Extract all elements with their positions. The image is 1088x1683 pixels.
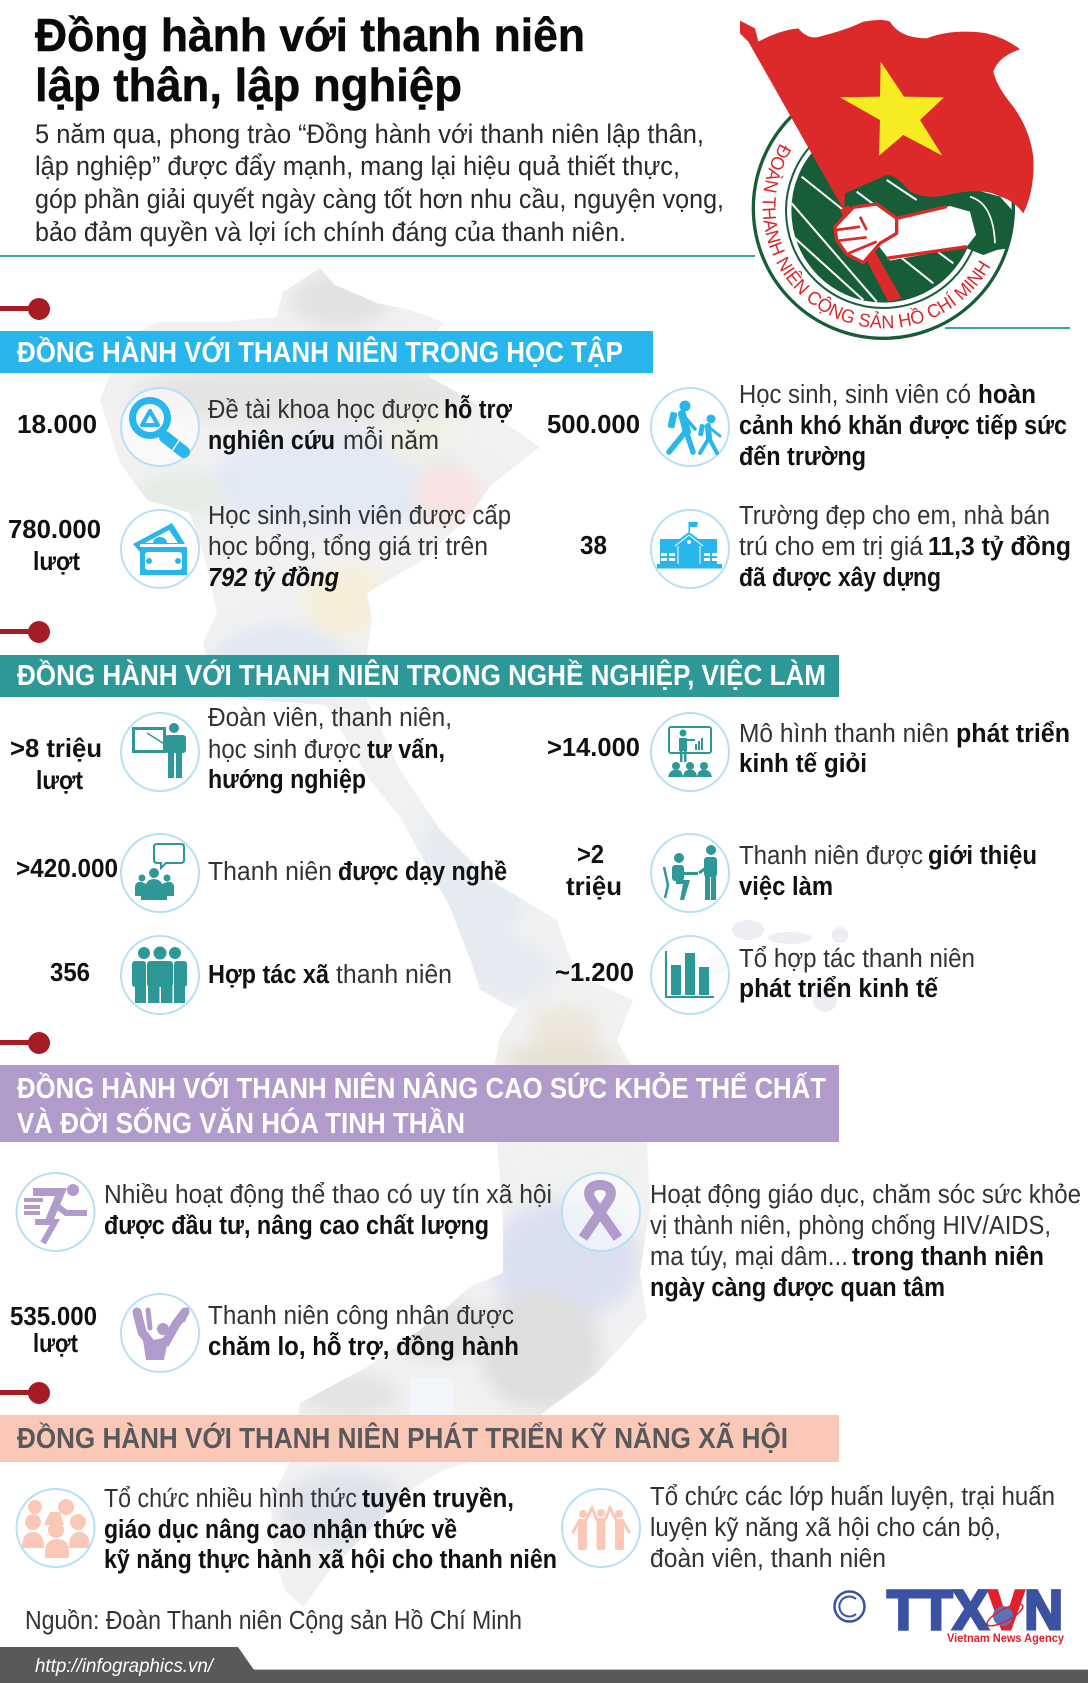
source: Nguồn: Đoàn Thanh niên Cộng sản Hồ Chí Minh: [25, 1607, 522, 1635]
stat: >14.000: >14.000: [547, 732, 640, 762]
stat: ~1.200: Tổ hợp tác thanh niên: [739, 945, 975, 973]
stat: 535.000 lượt: Thanh niên công nhân được: [208, 1302, 514, 1330]
section 2: career: [0, 621, 1070, 1014]
stat: 500.000: [547, 381, 1067, 471]
item: training: luyện kỹ năng xã hội cho cán bộ,: [650, 1514, 1001, 1542]
logo: TTXVN: Vietnam News Agency: [947, 1631, 1064, 1645]
stat: 38: 38: [580, 530, 607, 560]
stat: 780.000 lượt: 780.000: [8, 514, 101, 544]
intro text block: góp phần giải quyết ngày càng tốt hơn nhu cầu, nguyện vọng,: [35, 184, 724, 214]
item: HIV ribbon: trong thanh niên: [852, 1243, 1044, 1271]
stat: 18.000: hỗ trợ: [444, 394, 513, 424]
stat: >8 triệu lượt: Đoàn viên, thanh niên,: [208, 704, 452, 732]
stat: 780.000 lượt: lượt: [33, 546, 80, 576]
item: awareness: giáo dục nâng cao nhận thức về: [104, 1516, 457, 1544]
stat: >14.000: kinh tế giỏi: [739, 750, 867, 778]
stat: ~1.200: [555, 936, 975, 1014]
stat: >2 triệu: >2: [577, 839, 604, 869]
icon: copyright: [834, 1592, 864, 1622]
stat: >420.000: [16, 834, 507, 912]
item: sports: [16, 1173, 552, 1251]
heading: ĐỒNG HÀNH VỚI THANH NIÊN TRONG NGHỀ NGHIỆP, VIỆC LÀM: [17, 658, 826, 692]
stat: 780.000 lượt: [8, 502, 511, 592]
stat: >8 triệu lượt: học sinh được: [208, 736, 361, 764]
stat: 356: 356: [50, 957, 90, 987]
stat: >8 triệu lượt: [10, 704, 452, 795]
intro text block: [35, 119, 724, 247]
stat: 535.000 lượt: lượt: [33, 1328, 78, 1358]
stat: 535.000 lượt: [10, 1294, 519, 1372]
stat: 500.000: Học sinh, sinh viên có: [739, 381, 971, 409]
stat: 356: [50, 936, 452, 1014]
stat: >2 triệu: giới thiệu: [928, 842, 1037, 870]
item: training: [562, 1483, 1055, 1573]
stat: 780.000 lượt: Học sinh,sinh viên được cấp: [208, 502, 511, 530]
heading: [0, 1415, 839, 1462]
stat: >14.000: Mô hình thanh niên: [739, 720, 949, 748]
heading: ĐỒNG HÀNH VỚI THANH NIÊN PHÁT TRIỂN KỸ NĂNG XÃ HỘI: [17, 1421, 788, 1455]
stat: >2 triệu: Thanh niên được: [739, 842, 923, 870]
stat: >2 triệu: [566, 834, 1037, 912]
stat: 500.000: đến trường: [739, 443, 866, 471]
stat: >420.000: >420.000: [16, 853, 118, 883]
stat: 18.000: nghiên cứu: [208, 427, 335, 455]
stat: 500.000: hoàn: [978, 381, 1036, 409]
heading: ĐỒNG HÀNH VỚI THANH NIÊN NÂNG CAO SỨC KHỎE THỂ CHẤT: [17, 1071, 826, 1105]
stat: >2 triệu: triệu: [566, 871, 622, 901]
stat: 18.000: mỗi năm: [343, 426, 439, 455]
marker: [0, 1032, 50, 1054]
title: lập thân, lập nghiệp: [35, 59, 462, 111]
stat: 356: thanh niên: [336, 961, 452, 989]
stat: 38: [580, 502, 1071, 592]
stat: 535.000 lượt: chăm lo, hỗ trợ, đồng hành: [208, 1331, 519, 1361]
stat: 500.000: 500.000: [547, 409, 640, 439]
icon: youth union logo: ĐOÀN THANH NIÊN CỘNG SẢN HỒ CHÍ MINH: [762, 144, 990, 328]
item: HIV ribbon: [562, 1173, 1081, 1302]
section 1: study: [0, 298, 1071, 592]
stat: 356: Hợp tác xã: [208, 961, 330, 989]
stat: >8 triệu lượt: >8 triệu: [10, 733, 102, 763]
stat: >14.000: phát triển: [956, 720, 1070, 748]
stat: 780.000 lượt: học bổng, tổng giá trị trên: [208, 533, 488, 561]
item: training: Tổ chức các lớp huấn luyện, trại huấn: [650, 1483, 1055, 1511]
stat: 18.000: Đề tài khoa học được: [208, 396, 439, 424]
background map of Vietnam: [90, 260, 848, 1620]
marker: [0, 1382, 50, 1404]
heading: ĐỒNG HÀNH VỚI THANH NIÊN TRONG HỌC TẬP: [17, 335, 623, 369]
stat: 38: Trường đẹp cho em, nhà bán: [739, 502, 1050, 530]
footer bar: http://infographics.vn/: [35, 1656, 215, 1677]
title: [35, 9, 585, 111]
intro text block: lập nghiệp” được đẩy mạnh, mang lại hiệu quả thiết thực,: [35, 151, 680, 181]
intro text block: bảo đảm quyền và lợi ích chính đáng của thanh niên.: [35, 217, 626, 247]
item: HIV ribbon: ma túy, mại dâm...: [650, 1243, 848, 1271]
item: HIV ribbon: vị thành niên, phòng chống HIV/AIDS,: [650, 1212, 1051, 1240]
item: sports: Nhiều hoạt động thể thao có uy tín xã hội: [104, 1181, 552, 1209]
stat: 18.000: 18.000: [17, 409, 97, 439]
icon: youth union logo: [740, 20, 1034, 340]
section 4: social skills: [0, 1382, 1055, 1574]
section 3: health and culture: [0, 1032, 1081, 1372]
title: Đồng hành với thanh niên: [35, 9, 585, 61]
stat: 500.000: cảnh khó khăn được tiếp sức: [739, 412, 1067, 440]
stat: >2 triệu: việc làm: [739, 873, 833, 901]
item: training: đoàn viên, thanh niên: [650, 1545, 886, 1573]
stat: 38: trú cho em trị giá: [739, 533, 924, 561]
stat: 18.000: [17, 388, 513, 466]
heading: [0, 655, 839, 697]
marker: [0, 298, 50, 320]
stat: >420.000: Thanh niên: [208, 858, 332, 886]
stat: ~1.200: phát triển kinh tế: [739, 975, 939, 1003]
logo: TTXVN: TTXVN: [887, 1578, 1063, 1641]
stat: >8 triệu lượt: lượt: [36, 765, 83, 795]
stat: 38: đã được xây dựng: [739, 564, 941, 592]
item: awareness: kỹ năng thực hành xã hội cho thanh niên: [104, 1546, 557, 1574]
marker: [0, 621, 50, 643]
intro text block: 5 năm qua, phong trào “Đồng hành với thanh niên lập thân,: [35, 119, 704, 149]
stat: ~1.200: ~1.200: [555, 957, 634, 987]
stat: 780.000 lượt: 792 tỷ đồng: [208, 564, 339, 592]
heading: VÀ ĐỜI SỐNG VĂN HÓA TINH THẦN: [17, 1106, 465, 1140]
item: HIV ribbon: ngày càng được quan tâm: [650, 1274, 945, 1302]
stat: >8 triệu lượt: tư vấn,: [367, 736, 445, 764]
item: awareness: [16, 1485, 557, 1574]
stat: >8 triệu lượt: hướng nghiệp: [208, 766, 366, 794]
stat: 38: 11,3 tỷ đồng: [928, 533, 1071, 561]
stat: >14.000: [547, 713, 1070, 791]
stat: >420.000: được dạy nghề: [338, 858, 507, 886]
item: awareness: Tổ chức nhiều hình thức: [104, 1485, 357, 1513]
item: sports: được đầu tư, nâng cao chất lượng: [104, 1212, 489, 1240]
footer bar: [0, 1647, 1088, 1683]
heading: [0, 1065, 839, 1142]
stat: 535.000 lượt: 535.000: [10, 1301, 97, 1331]
item: awareness: tuyên truyền,: [362, 1485, 514, 1513]
